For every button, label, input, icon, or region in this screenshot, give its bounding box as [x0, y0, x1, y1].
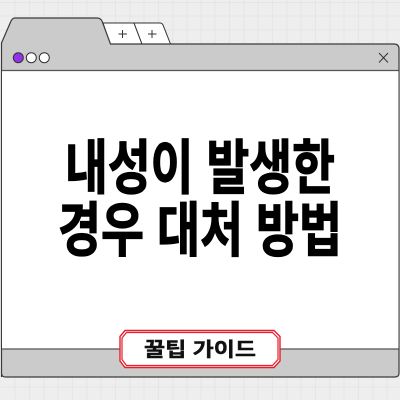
icon: plus on tab 1 — [118, 30, 127, 38]
content area — [2, 70, 398, 349]
badge: tip guide — [120, 330, 280, 368]
window control dots — [13, 53, 49, 63]
title — [58, 136, 342, 264]
background tabs — [103, 23, 170, 44]
title: 내성이 발생한 — [65, 136, 335, 202]
icon: purple dot — [13, 53, 23, 63]
badge: tip guide: 꿀팁 가이드 — [144, 339, 256, 361]
icon: white dot — [26, 53, 36, 63]
icon: close — [379, 53, 388, 62]
icon: white dot 2 — [39, 53, 49, 63]
icon: plus on tab 2 — [148, 30, 156, 38]
